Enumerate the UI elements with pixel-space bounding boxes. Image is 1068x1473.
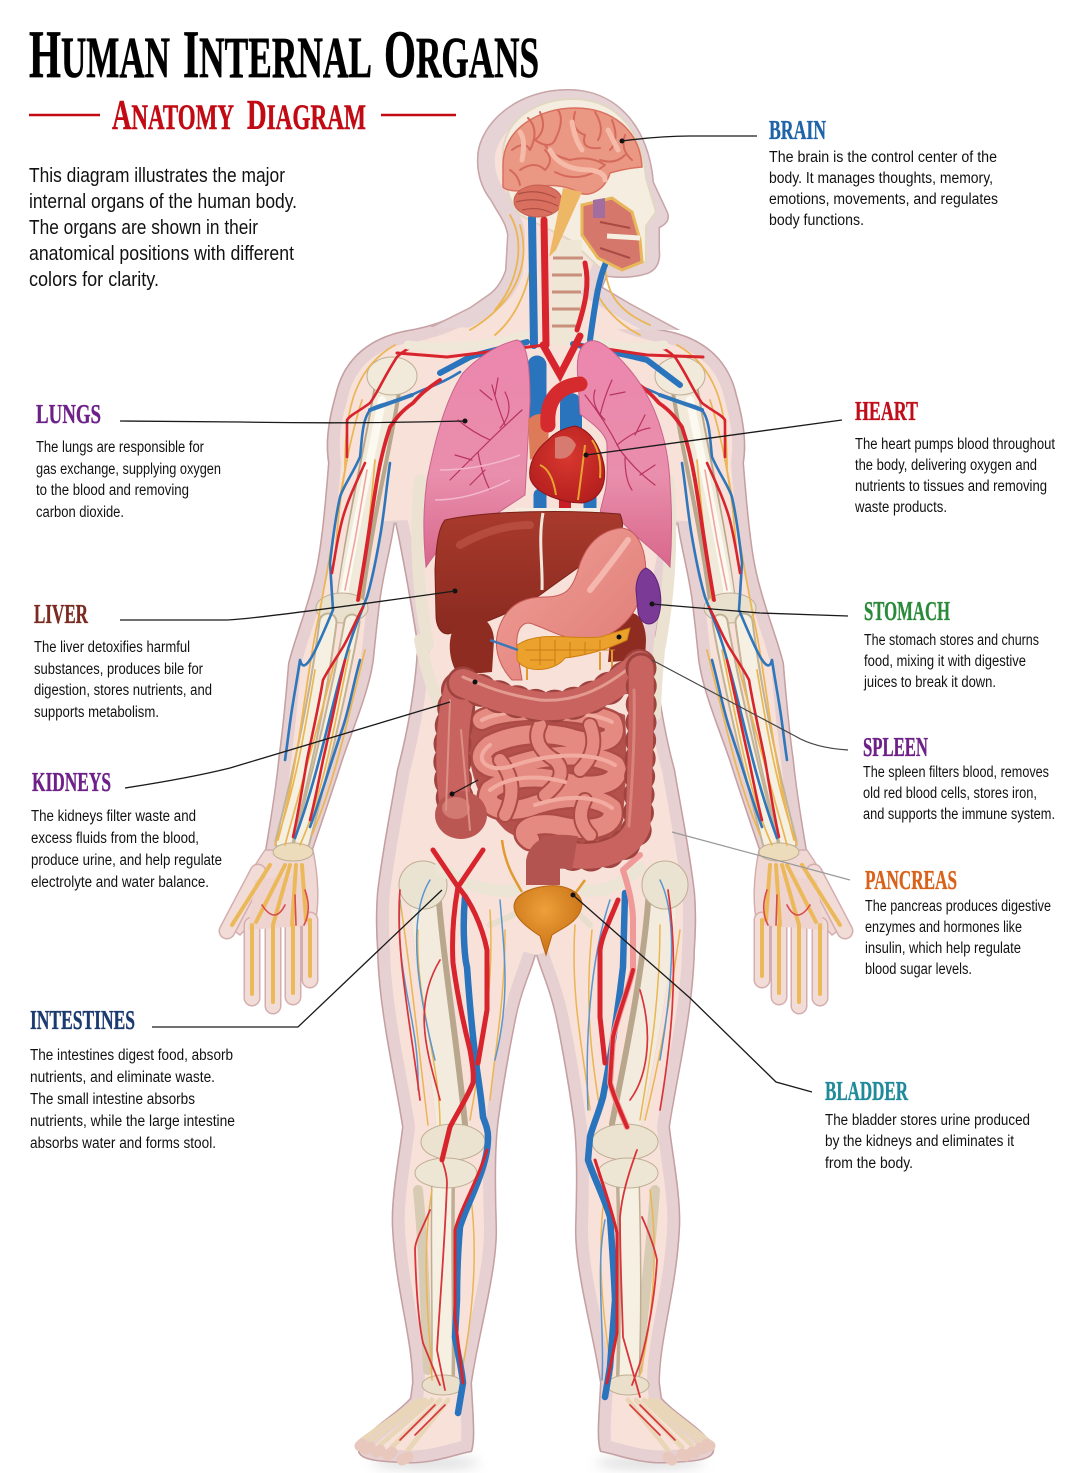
skull [503,99,656,268]
title: HUMAN [29,16,170,92]
pancreas [490,628,630,680]
title [29,16,539,92]
right arm details [612,345,846,1006]
lungs [424,340,672,567]
neck vessels [397,215,703,385]
callout: liver: digestion, stores nutrients, and [34,682,212,699]
large intestine [435,659,641,885]
callout: brain: BRAIN [769,115,826,145]
ascending colon [452,690,460,800]
callout: bladder: BLADDER [825,1076,908,1106]
bladder [514,886,582,955]
callout: spleen: SPLEEN [863,732,928,762]
callout: pancreas: blood sugar levels. [865,961,972,978]
left leg vessels [433,850,488,1413]
spleen [636,568,661,624]
intro text [29,165,297,291]
intro text: This diagram illustrates the major [29,165,285,187]
callout: pancreas: enzymes and hormones like [865,919,1022,936]
rectum [543,852,575,885]
callout: lungs: The lungs are responsible for [36,439,204,456]
callout: stomach: food, mixing it with digestive [864,653,1026,670]
callout: kidneys [31,702,450,891]
great vessels [537,336,590,512]
leader dots [450,138,654,898]
callout: brain [622,115,998,229]
kidneys [450,613,646,675]
callout: lungs [36,399,465,521]
small intestine [469,706,626,846]
callout: liver [34,591,455,721]
subtitle [29,93,456,139]
left lung [424,340,530,567]
subtitle: DIAGRAM [247,93,366,139]
liver [435,512,622,634]
left arm details [226,345,460,1006]
callout: pancreas: insulin, which help regulate [865,940,1021,957]
body skin, right side [536,296,807,1464]
lung branches [450,378,655,490]
callout: lungs: to the blood and removing [36,482,189,499]
title: ORGANS [384,16,539,92]
intro text: anatomical positions with different [29,243,294,265]
cerebellum [514,185,562,217]
right leg bones [592,861,710,1460]
callout: kidneys: KIDNEYS [32,767,111,797]
spine [552,240,583,345]
callout: liver: The liver detoxifies harmful [34,639,190,656]
intro text: colors for clarity. [29,269,159,291]
transverse colon [463,665,640,706]
callout: lungs: carbon dioxide. [36,504,124,521]
callout: intestines: absorbs water and forms stool. [30,1135,216,1152]
callout: brain: emotions, movements, and regulates [769,191,998,208]
callout: bladder: The bladder stores urine produced [825,1112,1030,1129]
callout: bladder: by the kidneys and eliminates it [825,1133,1015,1150]
callout: heart: waste products. [854,499,947,516]
callout: stomach: STOMACH [864,596,950,626]
human body illustration [226,89,846,1468]
callout: spleen [652,660,1055,823]
right kidney [608,613,646,662]
head and neck skin [430,89,680,330]
callout: bladder [573,895,1030,1172]
foot shadows [370,1458,705,1468]
stomach [496,528,646,680]
callout: lungs: gas exchange, supplying oxygen [36,461,221,478]
left kidney [450,616,494,675]
diaphragm line [515,508,600,512]
callout: bladder: from the body. [825,1155,913,1172]
callout: liver: LIVER [34,599,88,629]
heart [528,384,605,503]
title: INTERNAL [183,16,372,92]
callout: kidneys: electrolyte and water balance. [31,874,209,891]
callout: intestines: nutrients, and eliminate waste. [30,1069,215,1086]
callout: intestines [30,890,442,1152]
subtitle: ANATOMY [112,93,234,139]
callout: intestines: nutrients, while the large intestine [30,1113,235,1130]
callout: lungs: LUNGS [36,399,101,429]
callout: kidneys: produce urine, and help regulate [31,852,222,869]
callout: kidneys: excess fluids from the blood, [31,830,199,847]
callout: intestines: INTESTINES [30,1005,135,1035]
callout: stomach [652,596,1039,691]
callout: intestines: The intestines digest food, absorb [30,1047,233,1064]
brain [503,108,642,257]
callout: brain: body functions. [769,212,864,229]
intro text: The organs are shown in their [29,217,258,239]
callout: heart: the body, delivering oxygen and [855,457,1037,474]
callout: pancreas: PANCREAS [865,865,957,895]
descending and sigmoid colon [570,668,641,856]
body skin, left side [265,296,536,1464]
callout: spleen: old red blood cells, stores iron, [863,785,1037,802]
callout: stomach: juices to break it down. [863,674,996,691]
intro text: internal organs of the human body. [29,191,297,213]
right leg vessels [588,855,640,1397]
callout: brain: The brain is the control center of the [769,149,997,166]
callout: heart: HEART [855,396,918,426]
mouth and jaw [582,198,642,270]
left leg bones [360,861,485,1460]
callout: kidneys: The kidneys filter waste and [31,808,196,825]
pelvis [440,868,640,925]
callout: intestines: The small intestine absorbs [30,1091,195,1108]
chest bones and ribs [408,335,670,715]
brainstem [549,188,582,257]
ureters [502,840,585,895]
callout: liver: supports metabolism. [34,704,159,721]
callout: brain: body. It manages thoughts, memory, [769,170,993,187]
callout: liver: substances, produces bile for [34,661,203,678]
leg nerves and thin vessels [399,880,680,1397]
callout: heart [586,396,1056,516]
right lung [577,341,672,567]
callout: pancreas [672,832,1051,978]
